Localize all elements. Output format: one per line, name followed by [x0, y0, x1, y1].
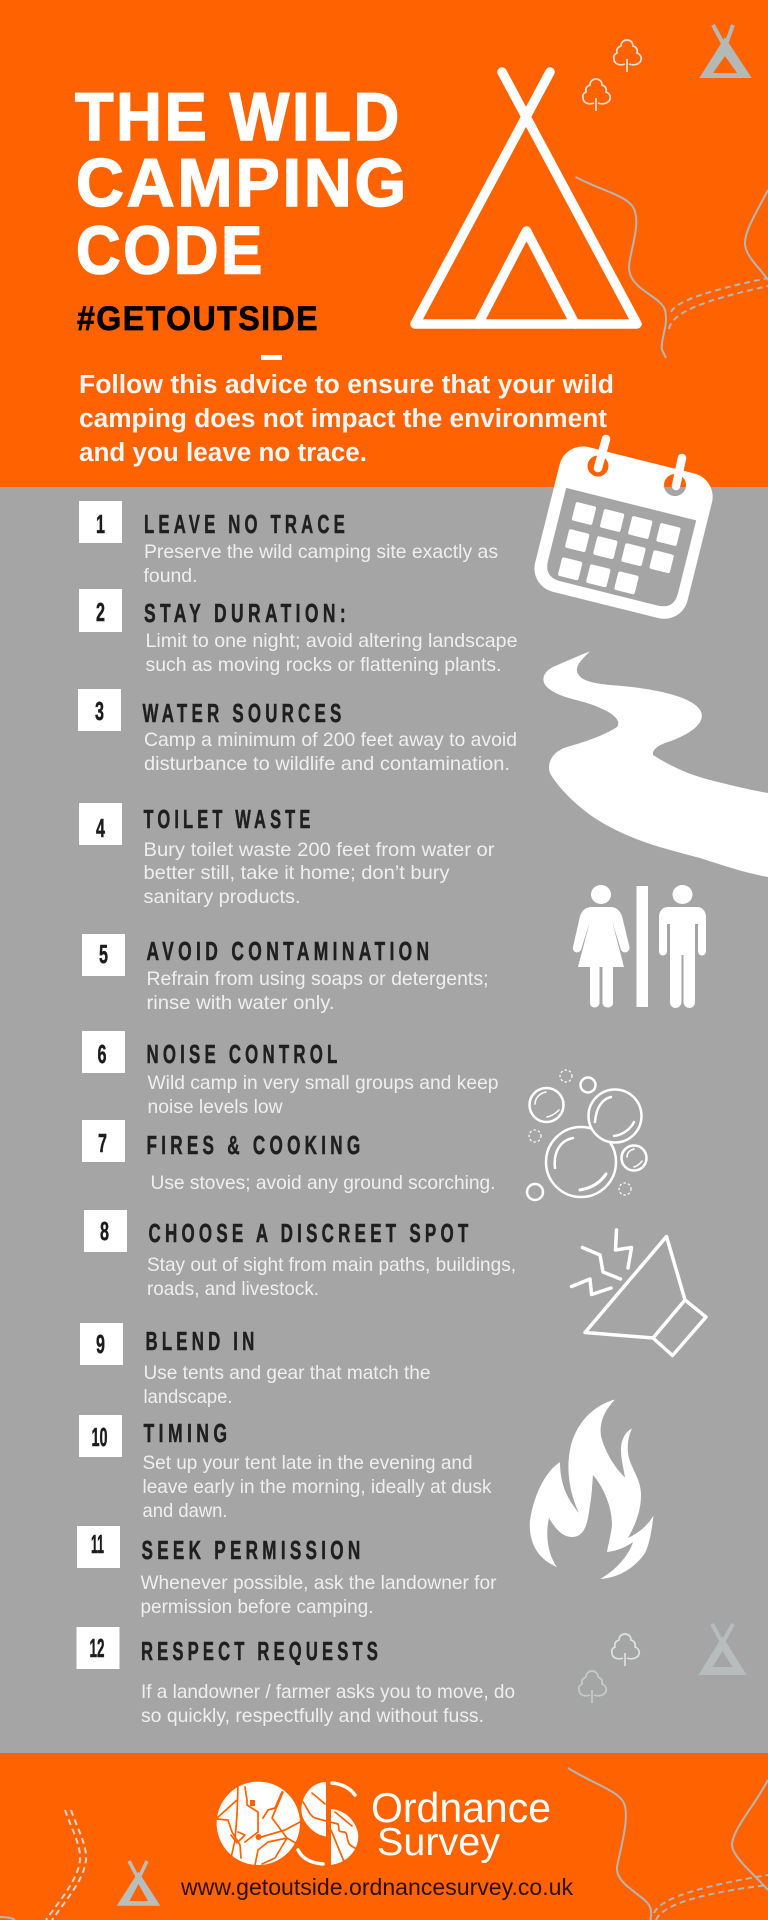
intro text: and you leave no trace. — [79, 439, 367, 467]
icon: soap bubbles — [527, 1070, 646, 1200]
rule 11 — [77, 1526, 497, 1618]
logo wordmark: Survey — [377, 1821, 500, 1864]
description 1 — [144, 541, 498, 587]
description 2 — [146, 630, 518, 676]
description 5 — [146, 968, 488, 1014]
description 5: rinse with water only. — [146, 992, 334, 1014]
number badge 3: 3 — [95, 696, 104, 726]
description 6: noise levels low — [148, 1096, 283, 1118]
description 4 — [144, 839, 495, 908]
description 12: so quickly, respectfully and without fuss. — [141, 1705, 484, 1727]
rule 10 — [79, 1415, 492, 1522]
OS map roundel — [217, 1782, 358, 1865]
intro text: Follow this advice to ensure that your wild — [79, 371, 614, 399]
rule 4 — [79, 803, 495, 908]
description 9: landscape. — [144, 1386, 232, 1408]
description 11 — [140, 1572, 497, 1618]
title: CAMPING — [76, 145, 409, 221]
description 1: Preserve the wild camping site exactly as — [144, 541, 498, 563]
heading 2: STAY DURATION: — [144, 598, 350, 628]
number badge 5: 5 — [99, 939, 108, 969]
number badge 10: 10 — [92, 1422, 108, 1452]
description 10: leave early in the morning, ideally at dusk — [142, 1476, 492, 1498]
panel: grey rules area — [76, 434, 768, 1726]
number badge 2 — [79, 589, 122, 632]
description 2: such as moving rocks or flattening plants. — [146, 654, 502, 676]
title: CODE — [76, 212, 265, 288]
heading 7: FIRES & COOKING — [146, 1130, 364, 1160]
icon: loudspeaker with noise — [572, 1230, 706, 1356]
number badge 9 — [80, 1323, 123, 1365]
rule 3 — [78, 689, 517, 775]
title: THE WILD — [75, 79, 402, 155]
icon: faded tree 2 — [579, 1671, 606, 1703]
description 7: Use stoves; avoid any ground scorching. — [150, 1172, 496, 1194]
icon: toilet figures — [573, 885, 706, 1008]
description 3: disturbance to wildlife and contamination. — [144, 753, 510, 775]
number badge 6 — [82, 1031, 125, 1073]
title — [75, 79, 409, 288]
description 4: better still, take it home; don’t bury — [144, 862, 450, 884]
number badge 4: 4 — [96, 813, 105, 843]
number badge 7 — [82, 1120, 125, 1162]
heading 6: NOISE CONTROL — [146, 1039, 342, 1069]
description 8: Stay out of sight from main paths, buildings, — [147, 1254, 516, 1276]
description 6: Wild camp in very small groups and keep — [148, 1072, 499, 1094]
number badge 6: 6 — [98, 1039, 106, 1069]
description 9 — [144, 1362, 430, 1408]
icon: faded tent — [702, 1624, 743, 1673]
icon: flame — [530, 1400, 654, 1579]
description 6 — [148, 1072, 499, 1118]
icon: faded tree 1 — [612, 1634, 639, 1666]
description 10: and dawn. — [142, 1500, 228, 1522]
number badge 8: 8 — [100, 1216, 109, 1246]
website URL: www.getoutside.ordnancesurvey.co.uk — [180, 1874, 573, 1900]
panel: orange footer — [0, 1753, 768, 1920]
number badge 12 — [76, 1627, 120, 1669]
icon: tree lower — [583, 79, 610, 111]
rule 12 — [76, 1627, 515, 1727]
logo: Ordnance Survey — [217, 1782, 551, 1865]
intro text — [79, 371, 614, 467]
icon: large white tent — [415, 72, 637, 324]
decorative footer paths — [0, 1768, 768, 1920]
number badge 11: 11 — [91, 1529, 104, 1559]
number badge 9: 9 — [96, 1329, 105, 1359]
icon: tree upper — [614, 40, 641, 72]
hashtag: #GETOUTSIDE — [77, 300, 319, 338]
rule 2 — [79, 589, 518, 676]
description 11: Whenever possible, ask the landowner for — [140, 1572, 497, 1594]
description 3: Camp a minimum of 200 feet away to avoid — [144, 729, 517, 751]
number badge 7: 7 — [98, 1128, 107, 1158]
description 4: Bury toilet waste 200 feet from water or — [144, 839, 495, 861]
rule 9 — [80, 1323, 430, 1408]
rule 5 — [82, 934, 488, 1014]
icon: footer tent — [120, 1861, 157, 1904]
number badge 4 — [79, 803, 122, 845]
heading 12: RESPECT REQUESTS — [141, 1636, 382, 1666]
description 2: Limit to one night; avoid altering landscape — [146, 630, 518, 652]
number badge 2: 2 — [96, 597, 105, 627]
number badge 10 — [79, 1415, 122, 1457]
icon: river — [543, 652, 768, 877]
number badge 1 — [79, 501, 122, 543]
dash — [261, 355, 282, 360]
heading 10: TIMING — [144, 1418, 232, 1448]
description 1: found. — [144, 565, 198, 587]
rule 1 — [79, 501, 498, 587]
number badge 1: 1 — [96, 509, 105, 539]
number badge 3 — [78, 689, 121, 731]
description 3 — [144, 729, 517, 775]
number badge 12: 12 — [90, 1633, 104, 1663]
description 8: roads, and livestock. — [147, 1278, 319, 1300]
description 5: Refrain from using soaps or detergents; — [146, 968, 488, 990]
heading 11: SEEK PERMISSION — [142, 1535, 364, 1565]
heading 9: BLEND IN — [146, 1326, 258, 1356]
icon: small grey tent — [703, 25, 748, 76]
description 12 — [141, 1681, 515, 1727]
logo wordmark: Ordnance — [371, 1784, 551, 1831]
description 4: sanitary products. — [144, 886, 300, 908]
heading 4: TOILET WASTE — [144, 804, 314, 834]
number badge 5 — [82, 934, 125, 976]
panel: orange header — [0, 0, 768, 487]
number badge 11 — [77, 1526, 120, 1568]
description 8 — [147, 1254, 516, 1300]
rule 6 — [82, 1031, 499, 1118]
description 10: Set up your tent late in the evening and — [142, 1452, 472, 1474]
heading 8: CHOOSE A DISCREET SPOT — [148, 1218, 472, 1248]
heading 3: WATER SOURCES — [142, 698, 346, 728]
description 9: Use tents and gear that match the — [144, 1362, 430, 1384]
description 11: permission before camping. — [140, 1596, 374, 1618]
description 10 — [142, 1452, 492, 1522]
rule 7 — [82, 1120, 496, 1194]
logo wordmark — [371, 1784, 551, 1864]
number badge 8 — [84, 1210, 127, 1252]
intro text: camping does not impact the environment — [79, 405, 608, 433]
rule 8 — [84, 1210, 516, 1300]
icon: calendar — [529, 439, 718, 624]
heading 1: LEAVE NO TRACE — [144, 509, 349, 539]
decorative river lines and dashed path — [576, 177, 768, 358]
heading 5: AVOID CONTAMINATION — [146, 936, 434, 966]
description 12: If a landowner / farmer asks you to move, do — [141, 1681, 515, 1703]
